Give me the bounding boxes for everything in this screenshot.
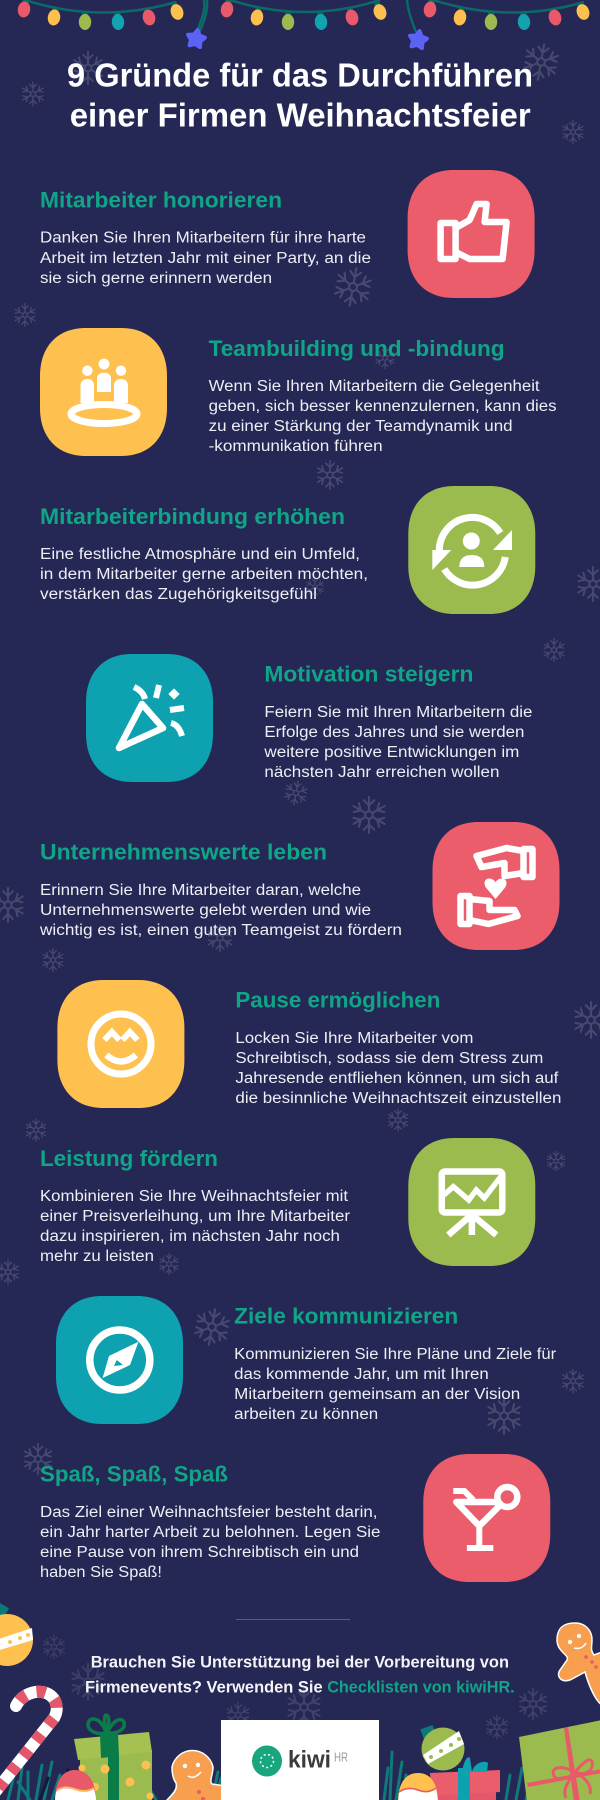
illustration: candy cane: [0, 1692, 57, 1796]
text block: Feiern Sie mit Ihren Mitarbeitern die: [264, 704, 532, 721]
heading: Pause ermöglichen: [235, 988, 440, 1013]
text block: Unternehmenswerte gelebt werden und wie: [40, 902, 371, 919]
text block: Mitarbeitern gemeinsam an der Vision: [234, 1386, 520, 1403]
text block: die besinnliche Weihnachtszeit einzustellen: [235, 1090, 561, 1107]
heading: Unternehmenswerte leben: [40, 839, 327, 864]
panel: Leistung fördern: [40, 1138, 535, 1266]
text block: [39, 882, 402, 939]
text block: [40, 230, 371, 287]
illustration: gingerbread man right: [557, 1623, 600, 1705]
text block: Kombinieren Sie Ihre Weihnachtsfeier mit: [40, 1188, 349, 1205]
illustration: large green gift: [519, 1720, 600, 1800]
text block: [40, 546, 368, 603]
text block: haben Sie Spaß!: [40, 1564, 162, 1581]
icon: user cycle: [408, 486, 535, 614]
heading: Teambuilding und -bindung: [209, 336, 505, 361]
call to action text: Firmenevents? Verwenden Sie: [85, 1678, 323, 1697]
panel: Pause ermöglichen: [57, 980, 561, 1108]
text block: verstärken das Zugehörigkeitsgefühl: [40, 586, 317, 603]
text block: [263, 704, 532, 781]
icon: thumbs up: [408, 170, 535, 298]
wordmark: kiwi: [288, 1747, 331, 1774]
heading: Ziele kommunizieren: [234, 1304, 458, 1329]
text block: Erinnern Sie Ihre Mitarbeiter daran, welche: [40, 882, 361, 899]
text block: Eine festliche Atmosphäre und ein Umfeld,: [40, 546, 360, 563]
text block: ein Jahr harter Arbeit zu belohnen. Legen Sie: [40, 1524, 380, 1541]
text block: weitere positive Entwicklungen im: [263, 744, 519, 761]
string lights at the top: [17, 0, 592, 48]
text block: Locken Sie Ihre Mitarbeiter vom: [235, 1030, 473, 1047]
icon: hands with heart: [432, 822, 560, 950]
text block: Das Ziel einer Weihnachtsfeier besteht darin,: [40, 1504, 378, 1521]
title: [67, 57, 533, 134]
illustration: yellow ornament: [0, 1602, 33, 1666]
icon: smiling face: [57, 980, 184, 1108]
heading: Mitarbeiter honorieren: [40, 187, 282, 212]
text block: in dem Mitarbeiter gerne arbeiten möchten,: [40, 566, 368, 583]
title: 9 Gründe für das Durchführen: [67, 57, 533, 94]
text block: Arbeit im letzten Jahr mit einer Party, an die: [40, 250, 371, 267]
panel: Motivation steigern: [86, 654, 532, 782]
text block: einer Preisverleihung, um Ihre Mitarbeiter: [40, 1208, 350, 1225]
text block: das kommende Jahr, um mit Ihren: [234, 1366, 489, 1383]
text block: sie sich gerne erinnern werden: [40, 270, 272, 287]
wordmark suffix: HR: [334, 1750, 348, 1764]
title: einer Firmen Weihnachtsfeier: [70, 96, 531, 134]
text block: [40, 1188, 350, 1265]
logo panel: [221, 1720, 379, 1800]
illustration: green gift: [74, 1715, 154, 1800]
panel: Mitarbeiterbindung erhöhen: [40, 486, 535, 614]
illustration: grass left: [8, 1762, 221, 1800]
text block: Kommunizieren Sie Ihre Pläne und Ziele für: [234, 1346, 556, 1363]
call to action text: Checklisten von kiwiHR.: [327, 1678, 515, 1697]
divider: [236, 1618, 350, 1620]
text block: [209, 378, 557, 455]
text block: eine Pause von ihrem Schreibtisch ein und: [40, 1544, 359, 1561]
text block: [234, 1346, 556, 1423]
call to action text: Brauchen Sie Unterstützung bei der Vorbereitung von: [91, 1653, 509, 1672]
text block: wichtig es ist, einen guten Teamgeist zu fördern: [39, 922, 402, 939]
text block: Schreibtisch, sodass sie dem Stress zum: [235, 1050, 543, 1067]
icon: cocktail: [423, 1454, 550, 1582]
text block: arbeiten zu können: [234, 1406, 378, 1423]
text block: [40, 1504, 380, 1581]
text block: Erfolge des Jahres und sie werden: [264, 724, 524, 741]
icon: team: [40, 328, 167, 456]
text block: Wenn Sie Ihren Mitarbeitern die Gelegenheit: [209, 378, 540, 395]
icon: party popper: [86, 654, 213, 782]
panel: Spaß, Spaß, Spaß: [40, 1454, 550, 1582]
panel: Unternehmenswerte leben: [39, 822, 559, 950]
heading: Mitarbeiterbindung erhöhen: [40, 504, 345, 529]
panel: Mitarbeiter honorieren: [40, 170, 535, 298]
illustration: grass right: [384, 1752, 570, 1800]
heading: Spaß, Spaß, Spaß: [40, 1462, 228, 1487]
heading: Motivation steigern: [264, 662, 473, 687]
illustration: red egg: [55, 1770, 96, 1800]
illustration: red gift: [430, 1757, 500, 1800]
text block: [235, 1030, 561, 1107]
illustration: gingerbread man left: [165, 1751, 225, 1800]
text block: mehr zu leisten: [40, 1248, 154, 1265]
icon: kiwi logo: [252, 1746, 282, 1776]
icon: presentation chart: [408, 1138, 535, 1266]
panel: Ziele kommunizieren: [56, 1296, 556, 1424]
call to action text: [85, 1653, 515, 1697]
text block: zu einer Stärkung der Teamdynamik und: [209, 418, 513, 435]
text block: geben, sich besser kennenzulernen, kann dies: [209, 398, 557, 415]
illustration: yellow egg: [398, 1773, 438, 1800]
icon: compass: [56, 1296, 183, 1424]
text block: Jahresende entfliehen können, um sich auf: [235, 1070, 559, 1087]
text block: dazu inspirieren, im nächsten Jahr noch: [40, 1228, 340, 1245]
text block: nächsten Jahr erreichen wollen: [264, 764, 499, 781]
panel: Teambuilding und -bindung: [40, 328, 557, 456]
text block: Danken Sie Ihren Mitarbeitern für ihre harte: [40, 230, 366, 247]
illustration: green ornament: [420, 1725, 464, 1770]
heading: Leistung fördern: [40, 1146, 218, 1171]
text block: -kommunikation führen: [209, 438, 383, 455]
